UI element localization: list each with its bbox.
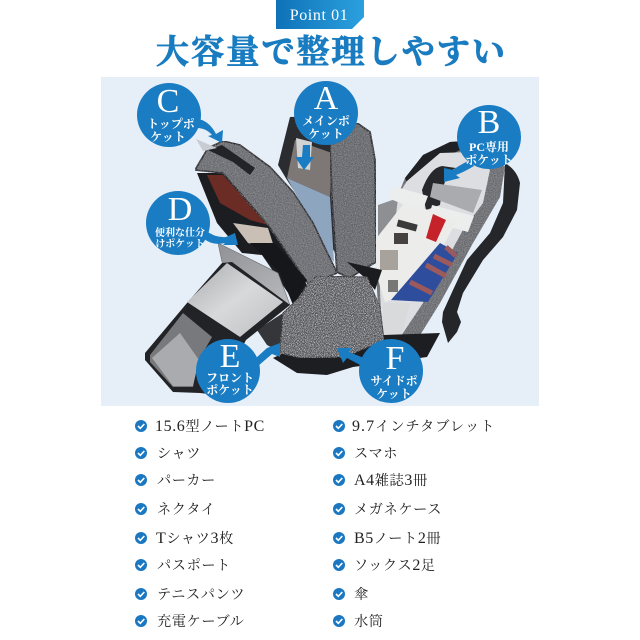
callout E: E: [220, 338, 240, 375]
front pouch: [280, 276, 384, 358]
callout C: C: [157, 83, 179, 120]
item: smartphone: [333, 446, 398, 462]
checklist: left column: [135, 418, 265, 630]
necktie: [391, 243, 458, 302]
item: socks: ソックス2足: [354, 557, 436, 574]
item: tablet: 9.7インチタブレット: [352, 418, 495, 435]
top flap: [195, 139, 337, 303]
item: magazines: A4雑誌3冊: [354, 472, 428, 489]
callout arrows: [197, 119, 474, 366]
callout F: ケット: [376, 387, 412, 401]
item: laptop: 15.6型ノートPC: [155, 418, 265, 435]
callout F: F: [386, 340, 404, 377]
red tag: [426, 214, 446, 242]
side black pocket item: [347, 262, 382, 290]
callout D: D: [168, 191, 192, 228]
callout D: 便利な仕分: [155, 226, 205, 239]
callout C: トップポ: [147, 117, 195, 131]
callout E: ポケット: [206, 383, 254, 397]
callout C: [137, 83, 201, 147]
item: water bottle: 水筒: [354, 613, 384, 630]
item: tennis pants: テニスパンツ: [157, 587, 245, 603]
callout E: フロント: [206, 371, 254, 385]
callout B: [457, 104, 521, 169]
callout E: [196, 338, 260, 403]
point badge: [276, 0, 364, 29]
callout C: ケット: [150, 130, 186, 144]
dark lower compartment: [257, 313, 300, 352]
back interior: [278, 115, 340, 260]
item: hoodie: パーカー: [157, 473, 216, 489]
dark compartment: [250, 243, 307, 305]
callout A: [294, 80, 358, 145]
callout B: PC専用: [469, 139, 509, 154]
item: shirt: [135, 446, 201, 462]
item: notebooks: B5ノート2冊: [354, 530, 441, 547]
backpack illustration: [145, 115, 520, 395]
item: umbrella: 傘: [354, 587, 369, 603]
point badge: Point 01: [290, 7, 348, 24]
callout F: サイドポ: [370, 374, 418, 388]
tablet: [218, 243, 290, 305]
laptop in PC pocket: [430, 183, 482, 213]
arrow D: [203, 230, 238, 245]
item: water bottle: [333, 613, 384, 630]
arrow E: [256, 343, 280, 366]
callout A: ケット: [308, 127, 344, 141]
main pocket column: [330, 123, 376, 278]
panel: backpack photo background: [101, 77, 539, 406]
callout B: ポケット: [465, 153, 513, 167]
shoulder strap: [442, 163, 520, 343]
callout A: メインポ: [302, 114, 350, 128]
item: charging cable: 充電ケーブル: [157, 613, 244, 630]
white straps: [388, 186, 474, 232]
callout D: [146, 191, 210, 255]
magazine: [375, 202, 457, 302]
arrow C: [197, 119, 223, 143]
item: shirt: シャツ: [157, 446, 201, 462]
callout D: けポケット: [155, 238, 205, 250]
item: glasses case: メガネケース: [354, 502, 442, 518]
arrow F: [337, 348, 364, 366]
callout A: A: [314, 80, 339, 117]
item: smartphone: スマホ: [354, 446, 398, 462]
base: [273, 333, 440, 375]
callout F: [359, 339, 423, 403]
item: passport: パスポート: [157, 558, 231, 574]
blue shirt: [287, 178, 334, 262]
item: t-shirts: Tシャツ3枚: [156, 530, 234, 547]
item: necktie: ネクタイ: [157, 502, 216, 518]
item: umbrella: [333, 587, 369, 603]
right back panel: [376, 140, 505, 357]
checklist: right column: [333, 418, 495, 630]
lower white pocket: [382, 303, 410, 340]
arrow B: [444, 160, 474, 182]
arrow A: [295, 145, 314, 170]
title: 大容量で整理しやすい: [156, 34, 505, 71]
front flap: [145, 262, 290, 395]
callout B: B: [478, 104, 500, 141]
